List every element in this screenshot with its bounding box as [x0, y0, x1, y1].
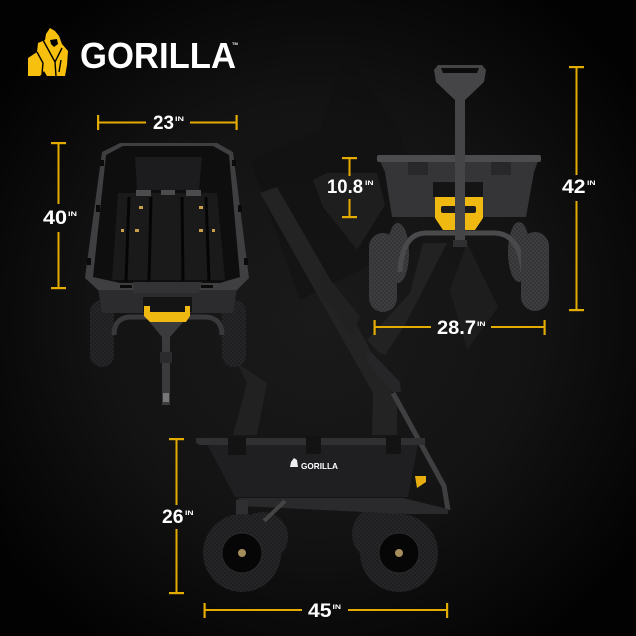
- tub interior: [93, 146, 240, 283]
- dimension: 40 in: 40: [43, 208, 67, 229]
- dimension: 45 in: 45: [308, 601, 332, 622]
- cart logo icon: [290, 458, 298, 467]
- dimension: 26 in: 26: [162, 507, 184, 528]
- rear wheels: [238, 507, 406, 562]
- cart logo text: GORILLA: [301, 461, 338, 471]
- rim latches: [87, 160, 248, 288]
- hinge plate: [143, 297, 192, 312]
- tub floor: [112, 193, 225, 280]
- trademark: TM: [232, 41, 238, 46]
- dimension: 45 in: IN: [332, 604, 341, 611]
- dimension: 42 in: [562, 66, 596, 311]
- dimension: 23 in: IN: [175, 116, 184, 123]
- dimension: 28.7 in: [374, 318, 546, 339]
- tongue: [148, 320, 185, 405]
- latches: [228, 436, 401, 455]
- yellow handle: [435, 197, 483, 230]
- dimension: 23 in: 23: [153, 113, 174, 134]
- top view cart: [85, 143, 249, 405]
- yellow handle: [415, 476, 426, 488]
- logo: [28, 28, 238, 76]
- dimension: 40 in: IN: [68, 211, 77, 218]
- front wheels: [369, 232, 549, 312]
- tub: [207, 444, 418, 497]
- latches: [408, 162, 511, 175]
- front view cart: [369, 65, 549, 312]
- floor bolts: [121, 206, 215, 232]
- brand name: GORILLA: [80, 35, 236, 76]
- side view cart: [196, 353, 448, 592]
- pull handle: [393, 393, 448, 510]
- dimension: 10.8 in: 10.8: [327, 177, 363, 198]
- dimension: 42 in: IN: [587, 180, 596, 187]
- dimension: 26 in: [162, 438, 194, 594]
- cart logo: [290, 458, 338, 471]
- dimension: 42 in: 42: [562, 177, 586, 198]
- dimension: 10.8 in: [327, 157, 374, 218]
- floor ribs: [126, 197, 209, 281]
- frame arch: [114, 317, 222, 335]
- front rim band: [133, 282, 202, 293]
- dimension: 45 in: [204, 601, 448, 622]
- tub rim: [85, 143, 249, 290]
- rim: [377, 155, 541, 162]
- gorilla watermark: [233, 50, 498, 435]
- wheels: [90, 300, 246, 367]
- rear wheels: [387, 222, 530, 283]
- yellow handle: [144, 306, 190, 322]
- front wheels: [203, 514, 438, 592]
- dimension: 40 in: [43, 142, 77, 289]
- dimension: 23 in: [97, 113, 238, 134]
- axle arch: [400, 233, 523, 272]
- rim: [196, 438, 425, 445]
- pull handle: [434, 65, 486, 247]
- frame: [238, 498, 448, 514]
- tub: [380, 161, 538, 217]
- dimension: 26 in: IN: [185, 510, 194, 517]
- grip: [367, 353, 401, 392]
- dimension: 10.8 in: IN: [365, 180, 374, 187]
- dark plate: [433, 182, 483, 197]
- dimension: 28.7 in: 28.7: [437, 318, 476, 339]
- tub body: [98, 288, 237, 313]
- dimension: 28.7 in: IN: [477, 321, 486, 328]
- icon: gorilla: [28, 28, 68, 76]
